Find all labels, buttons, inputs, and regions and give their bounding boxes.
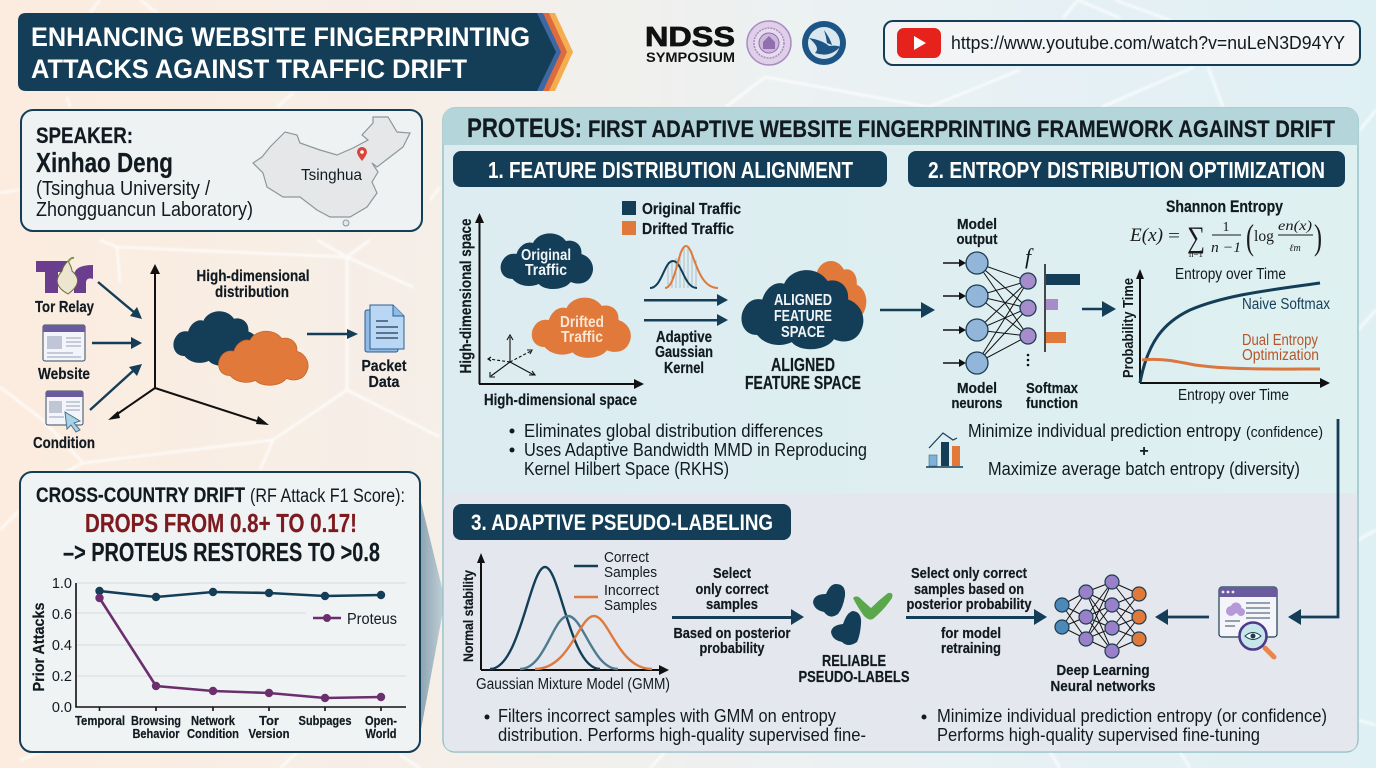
shannon entropy formula: ℓm — [1289, 243, 1301, 254]
line chart: Version — [248, 726, 290, 741]
icon: small axes — [488, 335, 535, 377]
softmax network: Model — [957, 380, 997, 397]
icon: condition — [46, 391, 83, 432]
entropy plot: Naive Softmax — [1242, 296, 1330, 313]
line chart: Tor — [259, 713, 279, 728]
gmm chart — [460, 549, 670, 693]
line chart: Proteus — [347, 611, 397, 628]
arrow: retraining: posterior probability — [906, 597, 1032, 613]
softmax network — [943, 216, 1080, 412]
section 1 feature space plot — [458, 213, 644, 409]
arrow: network to plot — [1082, 301, 1116, 317]
line chart: Behavior — [132, 726, 180, 741]
entropy plot: Entropy over Time — [1178, 387, 1289, 404]
line chart: Network — [191, 713, 236, 728]
icon: pseudo-label blobs and check — [813, 584, 892, 645]
icon: deep neural network: Neural networks — [1050, 678, 1156, 695]
icon: youtube — [897, 28, 941, 58]
line chart — [31, 576, 406, 741]
shannon entropy formula: n=1 — [1189, 249, 1203, 259]
bullets: section 3 left: distribution. Performs high-quality supervised fine- — [498, 725, 866, 745]
speaker name: Xinhao Deng — [36, 147, 173, 178]
title banner — [18, 13, 573, 91]
title banner: ATTACKS AGAINST TRAFFIC DRIFT — [31, 54, 467, 84]
youtube link box — [884, 21, 1360, 65]
arrow: section 1 to 2 — [880, 302, 935, 318]
softmax network: output — [956, 231, 998, 248]
youtube link box: https://www.youtube.com/watch?v=nuLeN3D94YY — [951, 33, 1345, 53]
legend: traffic: Original Traffic — [642, 201, 741, 218]
logo: Tsinghua seal — [747, 21, 791, 65]
panel: speaker — [21, 110, 422, 231]
cloud: original traffic: Original — [521, 247, 571, 264]
label: high-dimensional distribution — [196, 268, 310, 301]
line chart: Subpages — [298, 713, 352, 728]
line chart: Prior Attacks — [31, 602, 48, 692]
bullets: section 1 — [510, 421, 867, 479]
label: aligned feature space — [745, 355, 861, 393]
bullets: section 1: Uses Adaptive Bandwidth MMD in Reproducing — [524, 440, 867, 460]
entropy plot — [1120, 266, 1330, 404]
adaptive gaussian kernel: Gaussian — [655, 344, 713, 361]
title banner: ENHANCING WEBSITE FINGERPRINTING — [31, 22, 530, 52]
entropy plot: Entropy over Time — [1175, 266, 1286, 283]
line chart: 0.4 — [52, 638, 72, 654]
shannon entropy formula: log — [1254, 228, 1274, 245]
arrow: select correct samples: samples — [706, 597, 758, 613]
adaptive gaussian kernel: Kernel — [664, 360, 704, 377]
label: website: Website — [38, 366, 90, 383]
line chart: 1.0 — [52, 576, 72, 592]
label: reliable pseudo-labels — [798, 653, 910, 686]
diagram: high-dimensional distribution — [33, 258, 407, 452]
speaker affiliation: (Tsinghua University / — [36, 178, 210, 200]
chart heading — [36, 484, 405, 507]
3d axes — [108, 264, 269, 425]
legend: traffic: Drifted Traffic — [642, 221, 734, 238]
line chart: 0.0 — [52, 700, 72, 716]
icon: bar chart — [926, 433, 963, 467]
icon: China map: Tsinghua — [301, 167, 362, 184]
text: entropy objective: + — [1139, 443, 1149, 460]
icon: dark cloud — [173, 311, 259, 366]
chart heading: CROSS-COUNTRY DRIFT — [36, 484, 245, 507]
line chart: Open- — [365, 713, 397, 728]
shannon entropy formula: ∑ — [1187, 221, 1205, 254]
shannon entropy formula: ( — [1246, 217, 1254, 257]
gmm chart: Correct — [604, 549, 650, 566]
icon: orange cloud — [219, 331, 308, 385]
line chart: 0.2 — [52, 669, 72, 685]
cloud: original traffic — [501, 233, 593, 289]
callout: drop: DROPS FROM 0.8+ TO 0.17! — [85, 508, 357, 538]
arrow to packet data — [307, 329, 358, 339]
shannon entropy formula: E(x) — [1129, 225, 1163, 246]
label: high-dimensional distribution: distribution — [215, 284, 289, 301]
gmm chart: Gaussian Mixture Model (GMM) — [476, 676, 670, 693]
softmax network: f — [1025, 244, 1034, 269]
wedge connector — [420, 498, 445, 735]
label: aligned feature space: ALIGNED — [771, 355, 835, 375]
section header 2 — [908, 151, 1345, 187]
arrows into axes — [90, 282, 142, 410]
bullets: section 3 right: Minimize individual prediction entropy (or confidence) — [937, 706, 1327, 726]
entropy plot: Probability Time — [1120, 278, 1137, 378]
arrow: long connector — [1288, 419, 1338, 625]
cloud: aligned feature space: ALIGNED — [774, 292, 832, 309]
cloud: aligned feature space — [741, 261, 866, 349]
gmm chart: Samples — [604, 564, 657, 581]
section header 3 — [453, 504, 791, 540]
softmax network: Model — [957, 216, 997, 233]
label: condition: Condition — [33, 435, 95, 452]
arrow: retraining: for model — [941, 626, 1001, 642]
bullets: section 3 right: Performs high-quality supervised fine-tuning — [937, 725, 1260, 745]
speaker affiliation — [36, 178, 253, 221]
icon: deep neural network: Deep Learning — [1056, 662, 1150, 679]
section 1 feature space plot: High-dimensional space — [458, 218, 475, 374]
callout: restore: –> PROTEUS RESTORES TO >0.8 — [63, 537, 380, 567]
line chart: World — [366, 726, 397, 741]
shannon entropy formula: = — [1168, 226, 1180, 245]
shannon entropy formula: 1 — [1222, 220, 1230, 235]
panel: cross-country drift chart — [20, 472, 420, 752]
adaptive gaussian kernel — [644, 246, 728, 377]
label: packet data — [362, 358, 407, 391]
label: reliable pseudo-labels: PSEUDO-LABELS — [798, 669, 910, 686]
icon: China map — [253, 117, 410, 226]
arrow: select correct samples: probability — [700, 641, 764, 657]
line chart: Temporal — [75, 713, 125, 728]
shannon entropy formula: en(x) — [1278, 219, 1312, 234]
bullets: section 3 right — [922, 706, 1327, 745]
line chart: 0.6 — [52, 607, 72, 623]
arrow: retraining — [906, 566, 1047, 657]
icon: deep neural network — [1050, 575, 1156, 695]
softmax network: function — [1026, 395, 1078, 412]
text: entropy objective: (confidence) — [1246, 424, 1323, 441]
arrow: select correct samples — [672, 566, 804, 657]
shannon entropy formula: Shannon Entropy — [1166, 198, 1284, 216]
entropy plot: Dual Entropy — [1242, 332, 1318, 349]
label: reliable pseudo-labels: RELIABLE — [822, 653, 886, 670]
arrow: retraining: Select only correct — [911, 566, 1027, 582]
cloud: drifted traffic — [532, 298, 631, 358]
bullets: section 3 left — [484, 706, 866, 745]
logo: NDSS Symposium: SYMPOSIUM — [646, 50, 735, 65]
gmm chart: Samples — [604, 597, 657, 614]
logo: Zhongguancun Laboratory seal — [802, 21, 846, 65]
icon: website inspection — [1219, 587, 1277, 657]
entropy plot: Optimization — [1242, 347, 1319, 364]
label: tor relay: Tor Relay — [35, 299, 94, 316]
speaker affiliation: Zhongguancun Laboratory) — [36, 199, 253, 221]
arrow: select correct samples: only correct — [696, 582, 769, 598]
text: entropy objective — [968, 421, 1323, 479]
chart heading: (RF Attack F1 Score): — [250, 486, 405, 507]
adaptive gaussian kernel: Adaptive — [656, 329, 712, 346]
arrow: retraining: samples based on — [914, 582, 1024, 598]
speaker heading: SPEAKER: — [36, 123, 133, 148]
label: packet data: Data — [368, 374, 400, 391]
arrow: select correct samples: Select — [713, 566, 751, 582]
label: packet data: Packet — [362, 358, 407, 375]
gmm chart: Normal stability — [460, 570, 476, 662]
softmax network: neurons — [952, 395, 1002, 412]
bullets: section 1: Kernel Hilbert Space (RKHS) — [524, 459, 729, 479]
shannon entropy formula: ) — [1314, 217, 1322, 257]
logo: NDSS Symposium: NDSS — [645, 21, 735, 52]
legend: traffic — [622, 201, 741, 238]
main heading: PROTEUS: — [467, 113, 582, 143]
section header 1: 1. FEATURE DISTRIBUTION ALIGNMENT — [488, 157, 853, 183]
shannon entropy formula — [1129, 198, 1322, 259]
icon: Tor logo — [36, 258, 93, 294]
section header 1 — [453, 151, 887, 187]
cloud: original traffic: Traffic — [525, 262, 567, 279]
cloud: drifted traffic: Drifted — [560, 314, 604, 331]
section header 3: 3. ADAPTIVE PSEUDO-LABELING — [471, 510, 773, 535]
cloud: aligned feature space: FEATURE — [774, 308, 832, 325]
section 1 feature space plot: High-dimensional space — [484, 392, 637, 409]
cloud: drifted traffic: Traffic — [561, 329, 603, 346]
label: aligned feature space: FEATURE SPACE — [745, 373, 861, 393]
bullets: section 3 left: Filters incorrect samples with GMM on entropy — [498, 706, 836, 726]
logo: NDSS Symposium — [645, 21, 735, 65]
icon: document — [365, 305, 404, 352]
gmm chart: Incorrect — [604, 582, 660, 599]
arrow: select correct samples: Based on posterior — [674, 626, 791, 642]
text: entropy objective: Minimize individual prediction entropy — [968, 421, 1241, 441]
cloud: aligned feature space: SPACE — [781, 324, 825, 341]
panel: proteus main — [443, 108, 1358, 752]
softmax network: Softmax — [1026, 380, 1079, 397]
shannon entropy formula: n −1 — [1211, 240, 1241, 256]
line chart: Browsing — [131, 713, 181, 728]
arrow: retraining: retraining — [941, 641, 1001, 657]
line chart: Condition — [187, 726, 239, 741]
arrow: monitor to network — [1155, 609, 1209, 625]
bullets: section 1: Eliminates global distribution differences — [524, 421, 823, 441]
text: entropy objective: Maximize average batch entropy (diversity) — [988, 459, 1300, 479]
label: high-dimensional distribution: High-dimensional — [196, 268, 310, 285]
icon: website — [43, 325, 85, 361]
